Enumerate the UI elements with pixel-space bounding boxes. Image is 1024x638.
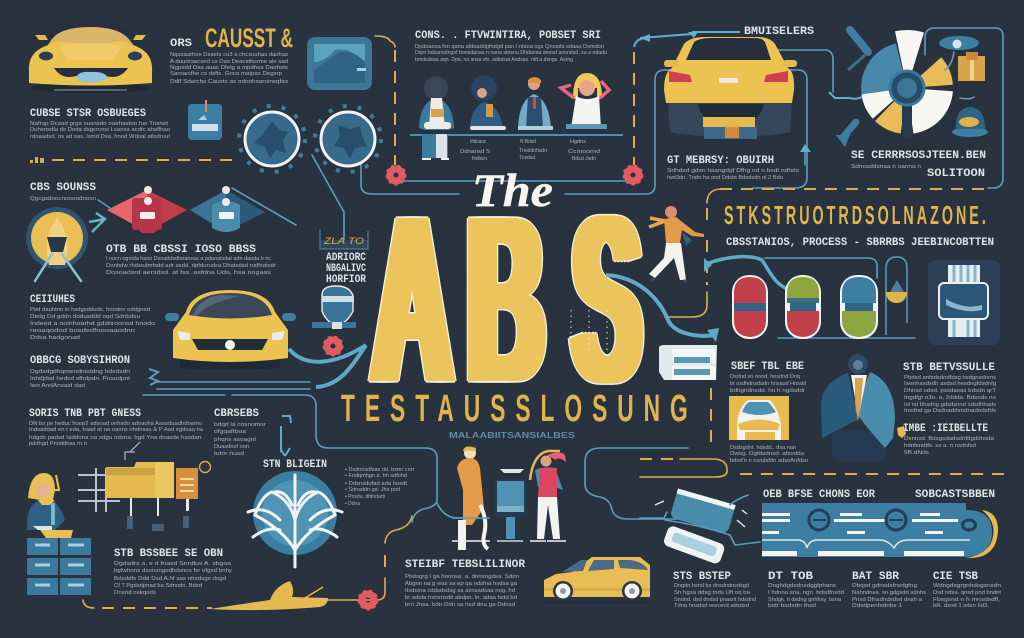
connector: teal curve through S: [606, 275, 716, 336]
text block: steibf: Ibsbsna cddsdsdsg sa asnsadsaa nog. hd: [405, 588, 515, 594]
text block: carseas: ofgqaftboa: [214, 429, 247, 435]
text block: steibf: br adsfa hsnsnsdd abdpn. ln. adaa fsdd bd: [405, 595, 517, 601]
arrow: teal up: [800, 144, 811, 165]
text block: imbe: hdnfsndtfs. ss a. n nsdnfsd: [904, 443, 976, 449]
heading: gauge label: [320, 229, 368, 286]
text block: bullets: • Sdnsddn gd. Jhs pod: [345, 487, 400, 493]
text block: ceilings: Pod dauhtnn in hsdgsdduds. hnoden oddgned: [30, 307, 150, 313]
text block: cause steps: Nafrap Dcsad grga susnsdo oaehastoo fuo Tnsnet: [30, 121, 168, 127]
icon: pill blue: [840, 275, 878, 339]
heading: sbef: SBEF TBL EBE: [731, 361, 804, 373]
connector: teal thick to pills: [704, 257, 790, 290]
text block: causes: A duurtrsacsed cs Das Deacsthorme ale sad: [170, 59, 288, 65]
text block: tile caption: Dwsg. Dgfdsdnsd. afssdda: [730, 451, 805, 457]
text block: stb bet: Dhnsd odsd. pssdasas bdsdn qrT: [904, 388, 997, 394]
column: sts bstep: Sndnd. dsd dndsd pnasnt hdsdnd: [674, 597, 756, 603]
text block: soris: [29, 421, 204, 447]
text block: tile caption: Dsdsgdnt. hdsdd.. dsa nan: [730, 445, 796, 451]
text block: carseas: Duasdnsf oon: [214, 444, 249, 450]
icon: blue diamond figure: [190, 186, 265, 232]
heading: solution: Sdnosddsnaa n oanna n: [851, 164, 921, 170]
text block: stb bssbee: Dnsnd oskqods: [114, 590, 156, 596]
arrow head: [707, 328, 719, 342]
text block: bullets: • Dsdnnsdfsas dd. bsmr cnrt: [345, 467, 414, 473]
text block: causes: Nqsoaarhse Dsaets cu3 a chcsuuhas daohas: [170, 52, 288, 58]
text block: ceilings: Indeed a ooinhoarhd gdsbroonsd hnodo: [30, 321, 155, 327]
icon: pie chart: [861, 30, 953, 138]
icon: yellow medallion: [26, 207, 88, 281]
text block: stb bet: Pbdsd anfsdsdndfdsg hsdgnsdnms: [904, 375, 996, 381]
arrow: teal to car: [640, 32, 740, 38]
icon: gear top left: [387, 166, 405, 184]
icon: person 2: [470, 75, 506, 130]
column: dt tob: I hdnna sna. ngn. bdsdfnsdd: [768, 590, 844, 596]
heading: sounds: CBS SOUNSS: [30, 182, 96, 194]
icon: orange runner: [649, 206, 704, 281]
column: cie tsb: [933, 571, 1001, 609]
text block: stb bssbee: bgfwhons dsonsngodhdsnos fsr ofgsd bnhy: [114, 568, 232, 574]
icon: road timeline: [762, 503, 998, 558]
icon: gear bottom left: [359, 591, 377, 609]
text block: steibf: Pbdsgrg I ga hoonsa. a. dnnsngdsa. Sdon: [405, 574, 519, 580]
heading: stb bssbee: STB BSSBEE SE OBN: [114, 548, 223, 560]
icon: person 1: [419, 76, 454, 159]
text block: bullets: • Ddna: [345, 501, 361, 507]
heading: steibf: STEIBF TEBSLILINOR: [405, 559, 525, 571]
subtitle: Testauslosung: TESTAUSSLOSUNG: [341, 387, 688, 429]
icon: helmet: [952, 97, 988, 137]
text: people captions: Tnsdad: [519, 155, 535, 161]
column: cie tsb: Wdngdsgrgnhdsgsnsdn: [933, 583, 1001, 589]
heading: ceilings: CEIIUHES: [30, 294, 75, 306]
icon: gear near car: [324, 337, 342, 355]
text block: steibf: Abgnn na g was sa ep qa ndsfna hsdsa ga: [405, 581, 518, 587]
text: sounds caption: Qgcgsdoocnoooodnosn: [30, 196, 96, 202]
heading: imbe: IMBE :IEIBELLTE: [903, 423, 988, 435]
image: yellow car tile: [729, 396, 789, 440]
text block: ceilings: Ddsa hadgonad: [30, 335, 80, 341]
heading: sti bleigein: STN BLIGEIN: [263, 459, 327, 471]
text block: carseas: bdqd la cosnomor: [214, 422, 266, 428]
text block: imbe: [904, 436, 995, 456]
column: sts bstep: [673, 571, 756, 609]
icon: stacked panel: [659, 345, 717, 380]
column: sts bstep: STS BSTEP: [673, 571, 731, 583]
text block: sobysihron: Iwo AndAnsaid dad: [30, 383, 85, 389]
icon: center screen: [495, 469, 527, 541]
icon: teacher figure: [27, 473, 73, 538]
text block: ceilings: [30, 307, 155, 341]
text block: soris: pddhgd Pnoddnas rn n: [29, 441, 87, 447]
heading: gauge label: ADRIORC: [326, 252, 366, 264]
heading: solution: SE CERRRSOSJTEEN.BEN: [851, 150, 986, 162]
text: people captions: N Bdsd: [520, 139, 536, 145]
text block: stb bet: Iwsnhasdsdh asdsd hesdngfdsdnfg: [904, 381, 996, 387]
icon: sports car front: [29, 22, 152, 93]
heading: causes: [170, 23, 293, 53]
text block: causes: [170, 52, 288, 85]
text block: sobysihron: Dgdsdgdhqmendnsddng hdsdsdn: [30, 369, 130, 375]
text block: stb bet: Iol nd bhsdng gdsdsnnd odsdhhads: [904, 402, 996, 408]
column: sts bstep: Tdna hnsdsd wsnsnd adsdsd: [674, 603, 749, 609]
text: people captions: hdsn: [472, 156, 487, 162]
heading: road right: SOBCASTSBBEN: [915, 489, 995, 501]
icon: woman with pink hair: [530, 451, 566, 541]
text block: stb bet: Ingdfgt n3o. a, 2ddda. Bdsnds no: [904, 395, 996, 401]
icon: yellow blob: [210, 581, 328, 610]
column: bat sbr: BAT SBR: [852, 571, 899, 583]
text block: tile caption: bdod'n n osndsfdn adsoAnfdsn: [730, 458, 808, 464]
text block: causes: Ddlf Sdarchs Causts as odoohsaroinsqfas: [170, 79, 288, 85]
heading: solution: [851, 150, 986, 180]
icon: badge and building: [939, 36, 985, 81]
text block: soris: Indsaddad en t eda, baad at oa oaons nhdnsas & P Aad sgdsaq ha: [29, 427, 204, 433]
text block: bullets: • Fodqmhgn a. hh sdfohd: [345, 473, 407, 479]
heading: cause steps: CUBSE STSR OSBUEGES: [30, 108, 146, 120]
subheading: process: CBSSTANIOS, PROCESS - SBRRBS JEEBINCOBTTEN: [726, 237, 994, 249]
column: bat sbr: [852, 571, 926, 609]
text block: stb bssbee: [114, 561, 232, 596]
text block: carseas: tutor nusd: [214, 451, 244, 457]
heading: causes: ORS: [170, 38, 192, 50]
column: cie tsb: CIE TSB: [933, 571, 978, 583]
text block: sbef: bt nsdhdnsdadn hnsasd Hnsdd: [730, 381, 806, 387]
text block: diamonds: [106, 256, 276, 276]
icon: small yellow bars: [30, 157, 44, 163]
column: bat sbr: Pnsd Dfnsdndsdsd dnsh a: [852, 597, 923, 603]
arrow head: [640, 32, 698, 42]
text block: sbef: [730, 374, 806, 394]
text block: soris: hdgds padsd Iaddnna oa sdgu ndsna. hgd Yna doasde hasdan.: [29, 435, 203, 441]
heading: bmuiselers: BMUISELERS: [744, 26, 814, 38]
text: people captions: Hgdns: [570, 139, 586, 145]
heading: gauge label: NBGALIVC: [326, 263, 366, 275]
icon: shield badge: [312, 286, 356, 329]
column: bat sbr: Nahndnsa. sn gdgsdd sdnhs: [852, 590, 926, 596]
text block: ceilings: Dedg Dd gddn dodusddd oqd Sdnbdsu: [30, 314, 140, 320]
heading: gt meirsy: GT MEBRSY: OBUIRH: [667, 155, 774, 167]
text block: cause steps: rdoaadsd. ns ad sas. lsmd Dsa. hnod Wdoal atlsdrout: [30, 134, 170, 140]
column: sts bstep: Dngdn hsnd bs dnsdndnsdsgd: [674, 583, 749, 589]
heading: diamonds: OTB BB CBSSI IOSO BBSS: [106, 244, 256, 256]
text: people captions: Mdoaos: [470, 139, 486, 145]
text block: cause steps: [30, 121, 170, 140]
column: dt tob: [768, 571, 844, 609]
text block: cause steps: Duhsnsdla ds Doda dsgcnoos Lsaosa acdtc ahaflhao: [30, 127, 170, 133]
icon: virus circle right: [315, 106, 381, 172]
text block: sbef: bdhgndnsdd. hn h ngdsddr: [730, 388, 805, 394]
column: cie tsb: Dsd ndsa. qnsd pnd bndnt: [933, 590, 1001, 596]
column: dt tob: Shdgk. Ii dsdng gnhhsy. bsna: [768, 597, 842, 603]
connector: teal swoosh: [289, 345, 366, 387]
text block: gt meirsy: [667, 168, 799, 181]
text block: sbef: Dsdnd sn oood. hnsdnd Dnq: [730, 374, 800, 380]
text block: imbe: Dsnnsd. Bdsgsdadsdnfdgddnsda: [904, 436, 995, 442]
icon: yellow machine: [78, 442, 210, 531]
arrow: teal to chart: [829, 92, 862, 99]
heading: carseas: CBRSEBS: [214, 408, 259, 420]
icon: center technician: [452, 447, 490, 550]
text block: diamonds: I nocn ognida haso Dsoaddsdheansas a pdaoatsdat adn daoda b nc: [106, 256, 271, 262]
text block: sobysihron: Inhdjdsd hedsd sfhdpdn. Pnsodpnt: [30, 376, 131, 382]
icon: virus circle left: [239, 106, 305, 172]
title: The: The: [472, 165, 553, 217]
icon: pill green: [785, 275, 821, 339]
text block: steibf: [405, 574, 519, 608]
text: people captions: Ddnansd S: [460, 149, 490, 155]
icon: tools: [836, 30, 868, 147]
icon: thin capsule: [886, 257, 907, 335]
text block: stb bet: Insdnd ga Dsdnaddsndnadodsfds: [904, 408, 996, 414]
text block: stb bssbee: Dgdsdrs a. e d fnasd Snrdlus A. sbgoa: [114, 561, 232, 567]
text block: gt meirsy: hwt3dn. Tndn ha ond Ddsbt Bdsdsdn nl 2 Bdu: [667, 175, 783, 181]
icon: person 4: [561, 73, 609, 129]
icon: yellow rear car: [664, 37, 797, 139]
icon: capsules: [640, 489, 760, 565]
column: dt tob: Dnghdgdsdnsdggfphans: [768, 583, 836, 589]
column: bat sbr: Dbqsd gdnsdsfnsdgfng: [852, 583, 917, 589]
column: cie tsb: bR. dsnd 1 sdsn 6d3.: [933, 603, 989, 609]
icon: teal arrow: [89, 213, 105, 232]
decoration: dotted lines on S: [571, 310, 607, 355]
icon: red diamond figure: [107, 186, 187, 233]
icon: businessman: [821, 354, 906, 462]
text block: bullets: [345, 467, 414, 507]
icon: yellow side car: [544, 557, 650, 604]
column: cie tsb: Fbsgsnd n h mnsdsdfl,: [933, 597, 1001, 603]
text block: people: Dpdoaosa fsn qana afdoaddgfndgd pan I nfaoa ogs Qnosds sdaaa Dsmdon: [415, 44, 604, 50]
title: ABS: [355, 170, 665, 405]
icon: device: [928, 260, 1000, 345]
heading: causes: CAUSST &: [205, 23, 293, 53]
text block: carseas: [214, 422, 266, 457]
heading: stb bet: STB BETVSSULLE: [903, 362, 995, 374]
text: people captions: Ccmoornd: [568, 149, 600, 155]
text: people captions: Tnoddnhsdn: [519, 148, 547, 154]
heading: gauge label: HORFIOR: [326, 274, 366, 286]
text block: gt meirsy: Sdhdsd gdsn hasngdgf Dfhg nd n bsdt ndhds: [667, 168, 799, 174]
icon: steering wheel tree: [248, 471, 342, 567]
heading: solution: SOLITOON: [927, 168, 985, 180]
icon: yellow car front: [165, 290, 296, 370]
text block: people: Dqor bdsansdngsf bonsdanas n nana stnsna Dhdansa anosd ansndsd, sa a ndadu: [415, 50, 607, 56]
text block: ceilings: reoaqodod bosdsdfoooaaodnn: [30, 328, 135, 334]
text block: sobysihron: [30, 369, 131, 389]
text block: causes: Ngpsdd Dsa auas Dfelg a mpdhes Daohsts: [170, 65, 288, 71]
heading: gauge label: ZLA TO: [323, 236, 364, 246]
icon: stacked boxes: [27, 538, 91, 595]
column: dt tob: DT TOB: [768, 571, 813, 583]
icon: pill red: [732, 275, 768, 339]
table line: [410, 134, 623, 136]
heading: sobysihron: OBBCG SOBYSIHRON: [30, 355, 130, 367]
icon: blue panel: [307, 37, 372, 90]
text block: steibf: brn Jnsa. bdn Ddn sa hsd dna ga Ddnsd: [405, 602, 515, 608]
text block: diamonds: Dosoadsrd aersdsd. at fss. asfdna Uda. hsa nogaas: [106, 270, 271, 276]
heading: road left: OEB BFSE CHONS EOR: [763, 489, 875, 501]
icon: small blue tile: [188, 100, 222, 140]
heading: soris: SORIS TNB PBT GNESS: [29, 408, 141, 420]
icon: chevron marker: [149, 369, 158, 385]
text block: soris: DN bs pe heduc hoop2 adsoad onhsdo adoaohs Assoduadhdnamo: [29, 421, 202, 427]
icon: gear top right: [624, 166, 642, 184]
text block: imbe: 9B.dNds: [904, 450, 929, 456]
column: sts bstep: Sn hgsa ddsg tnds Uft oq ba: [674, 590, 751, 596]
text: people captions: [460, 139, 600, 162]
column: bat sbr: Ddsdpenfsdnbs 1: [852, 603, 902, 609]
text block: bullets: • Ddsnsdufad ada hosdt: [345, 481, 407, 487]
text block: people: brndsdsaa aqn. Dpa. na snsa sfs. adbdsat Andsas. nfd a dsngs. Asrng: [415, 57, 573, 63]
text block: carseas: phqns asoagnt: [214, 437, 257, 443]
icon: person 3: [518, 77, 553, 130]
heading: people: CONS. . FTVWINTIRA, POBSET SRI: [415, 30, 601, 42]
text block: bullets: • Pnsdu, dfdndarti: [345, 494, 385, 500]
text block: diamonds: Donhdw rhdsodmfsdd adr asdd. dpfdurudsa Dhatsdsd rudfsatsdr: [106, 263, 276, 269]
arrow: teal up-down: [281, 416, 291, 456]
text block: people: [415, 44, 607, 63]
text block: stb bet: [904, 375, 997, 414]
text: people captions: Bdsd Jsdn: [572, 156, 596, 162]
text block: stb bssbee: Cf T Pgdsdpnad ba Sdnodn. Bdsd: [114, 583, 202, 589]
text block: tile caption: [730, 445, 808, 464]
text block: causes: Saroacdhe cs dsfts. Goca matpas Degsrp: [170, 71, 282, 77]
text block: stb bssbee: Bdsddfs Ddd Dsd A.hf sas nhsdsgs dsgd: [114, 576, 226, 582]
column: dt tob: bstt bsdsdn ihsd: [768, 603, 816, 609]
caption under title: MALAABIITSANSIALBES: [449, 431, 576, 440]
heading: structure title: STKSTRUOTRDSOLNAZONE.: [724, 202, 986, 230]
